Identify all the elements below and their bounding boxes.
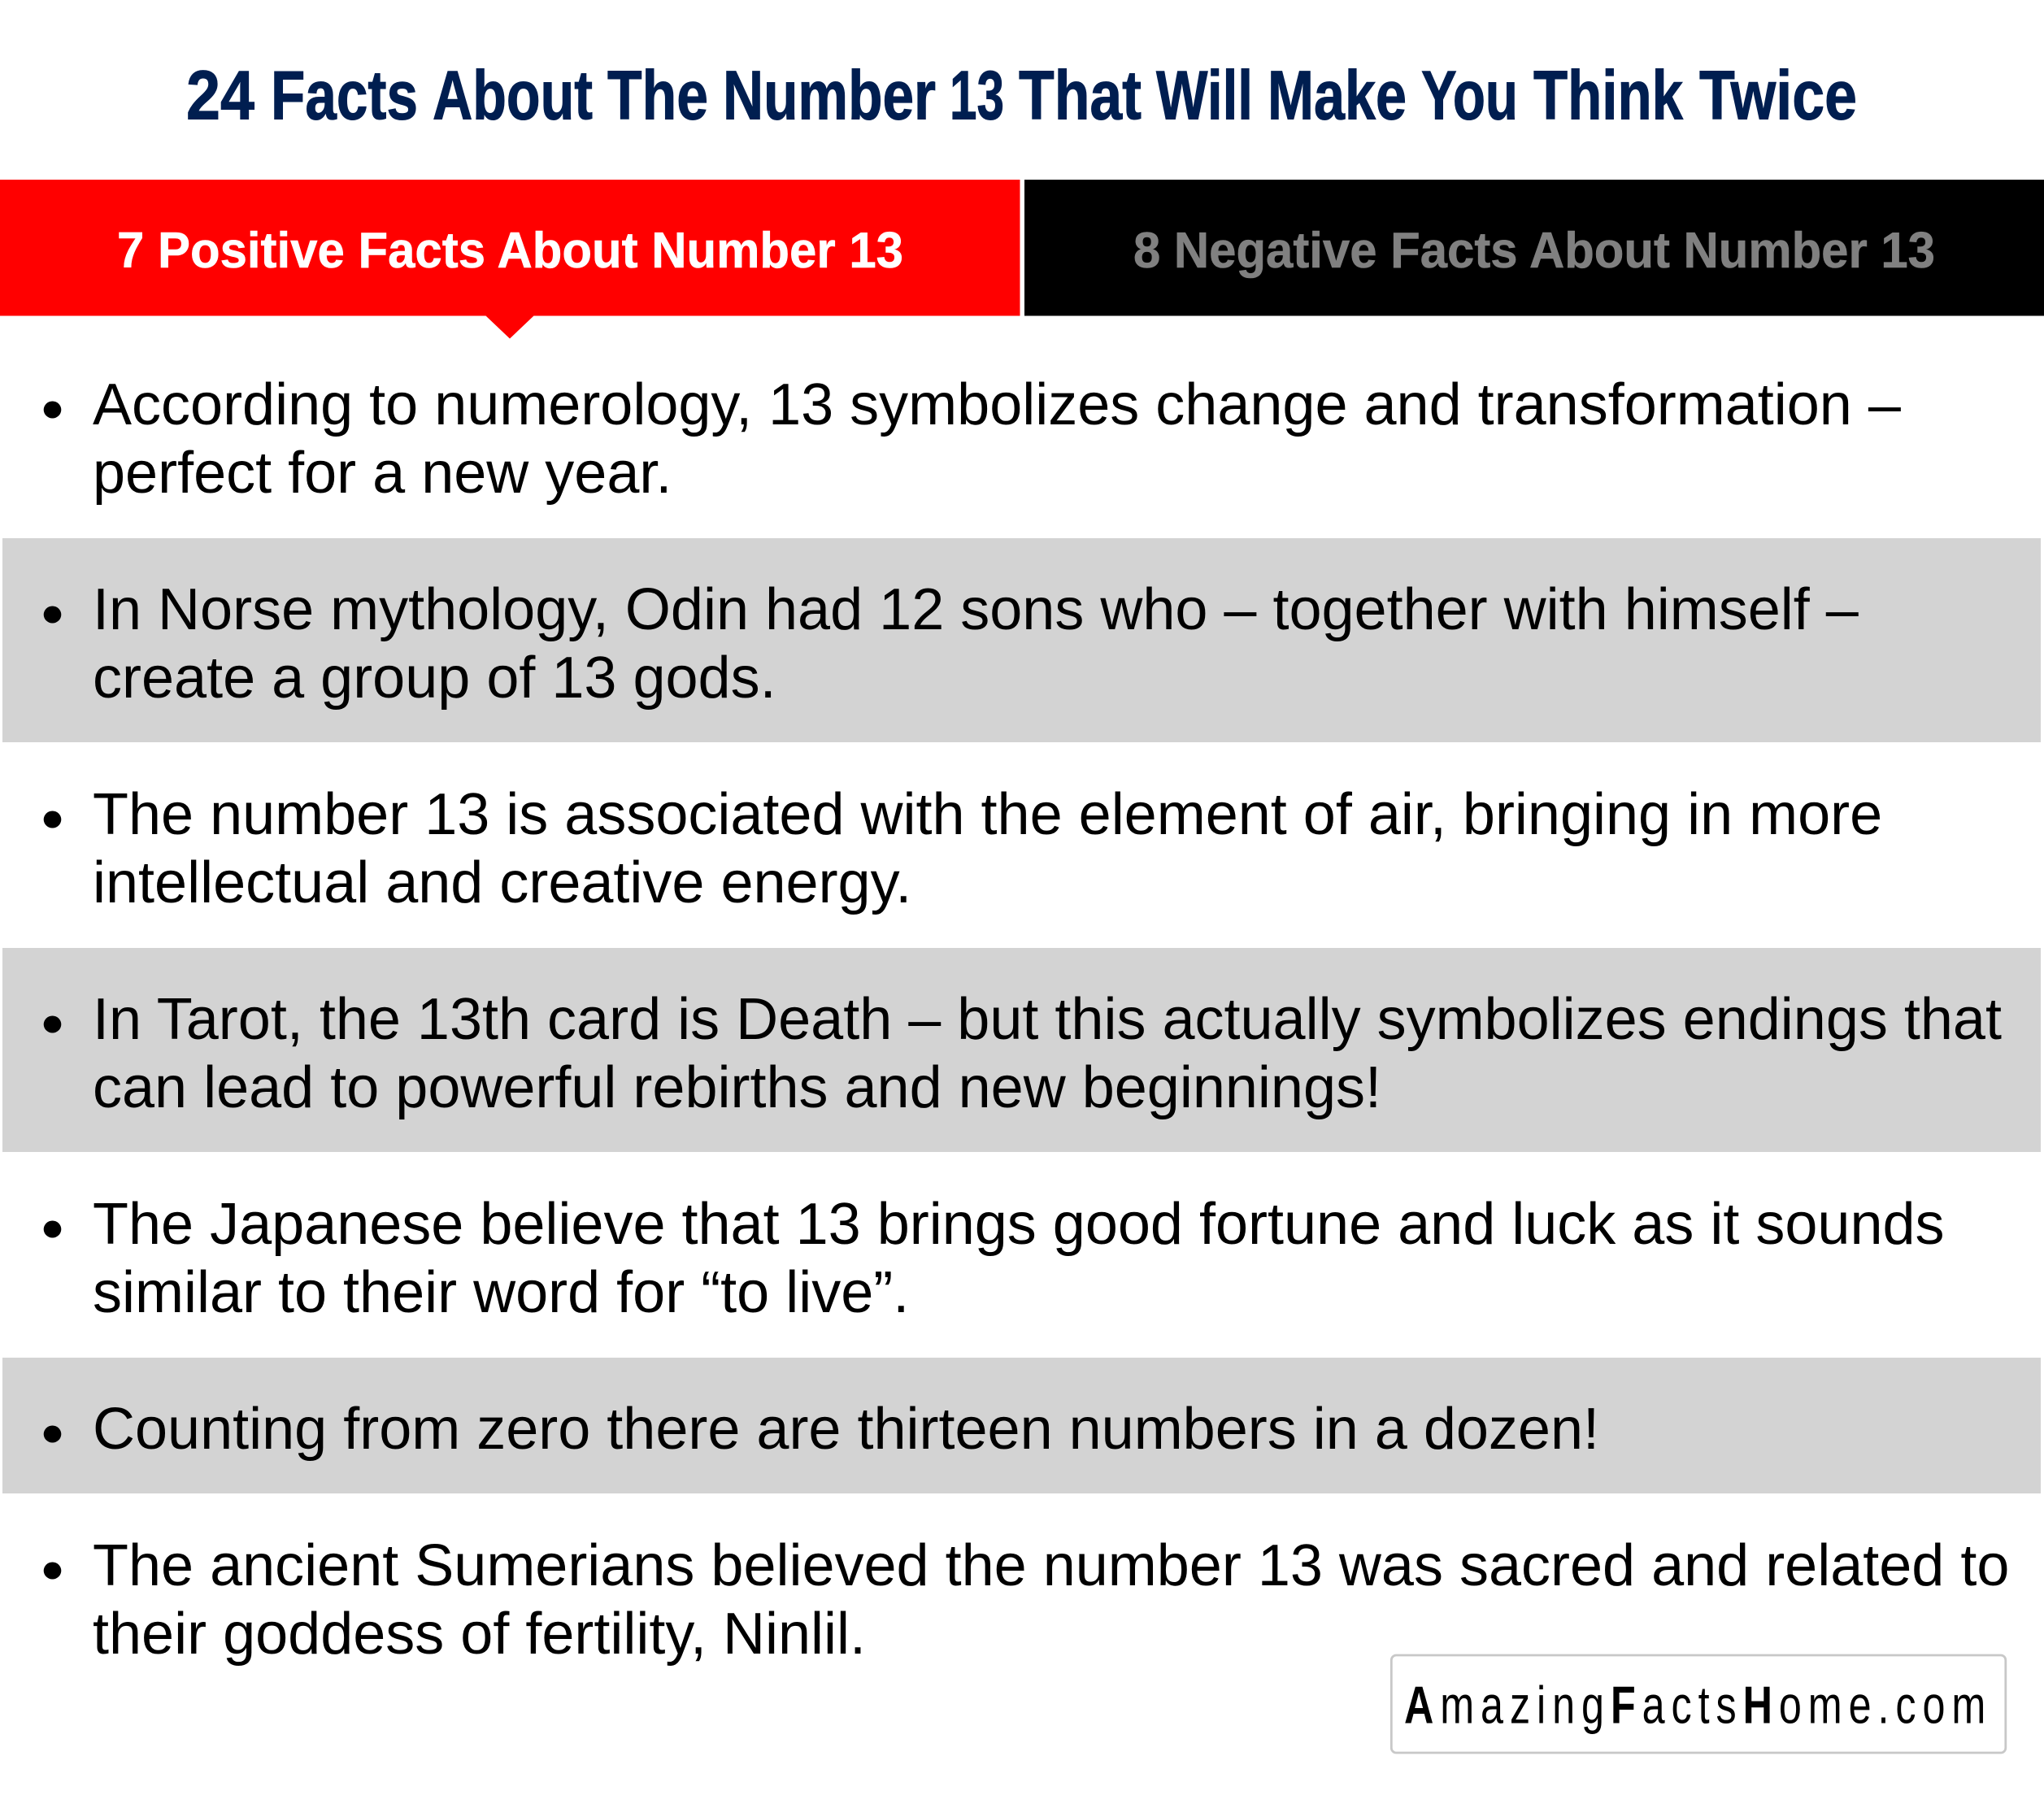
- title: 13: [950, 57, 1004, 135]
- fact 7: The ancient Sumerians believed the number 13 was sacred and related to: [93, 1533, 2009, 1598]
- fact 1: perfect for a new year.: [93, 441, 672, 506]
- fact 4: In Tarot, the 13th card is Death – but this actually symbolizes endings that: [93, 987, 2002, 1052]
- tab: positive facts: 7 Positive Facts About Number 13: [117, 222, 903, 279]
- fact 2: create a group of 13 gods.: [93, 646, 776, 711]
- fact 4: can lead to powerful rebirths and new beginnings!: [93, 1055, 1381, 1120]
- tab: positive facts: [0, 180, 1020, 338]
- title: About: [433, 57, 593, 135]
- title: Make: [1268, 57, 1407, 135]
- fact 1: [44, 372, 1902, 506]
- logo: AmazingFactsHome.com: [1391, 1655, 2006, 1753]
- fact 3: The number 13 is associated with the element of air, bringing in more: [93, 782, 1882, 847]
- title: 24: [186, 57, 254, 135]
- fact 7: their goddess of fertility, Ninlil.: [93, 1602, 866, 1667]
- logo: AmazingFactsHome.com: AmazingFactsHome.com: [1404, 1676, 1985, 1735]
- title: That: [1019, 57, 1142, 135]
- fact 3: intellectual and creative energy.: [93, 850, 911, 915]
- fact 7: [44, 1533, 2009, 1667]
- fact 2: [2, 538, 2041, 742]
- title: Number: [723, 57, 936, 135]
- fact 1: According to numerology, 13 symbolizes change and transformation –: [93, 372, 1902, 437]
- fact 5: similar to their word for “to live”.: [93, 1260, 909, 1325]
- title: The: [607, 57, 708, 135]
- fact 3: [44, 782, 1882, 915]
- fact 2: In Norse mythology, Odin had 12 sons who – together with himself –: [93, 577, 1859, 642]
- title: Will: [1156, 57, 1253, 135]
- fact 4: [2, 948, 2041, 1152]
- fact 6: Counting from zero there are thirteen numbers in a dozen!: [93, 1397, 1599, 1462]
- title: You: [1421, 57, 1518, 135]
- fact 5: The Japanese believe that 13 brings good fortune and luck as it sounds: [93, 1192, 1945, 1257]
- title: Think: [1533, 57, 1684, 135]
- fact 5: [44, 1192, 1945, 1325]
- title: [186, 57, 1857, 135]
- tab: negative facts: [1024, 180, 2044, 315]
- tab: negative facts: 8 Negative Facts About Number 13: [1133, 222, 1935, 279]
- fact 6: [2, 1358, 2041, 1493]
- title: Facts: [271, 57, 418, 135]
- title: Twice: [1699, 57, 1857, 135]
